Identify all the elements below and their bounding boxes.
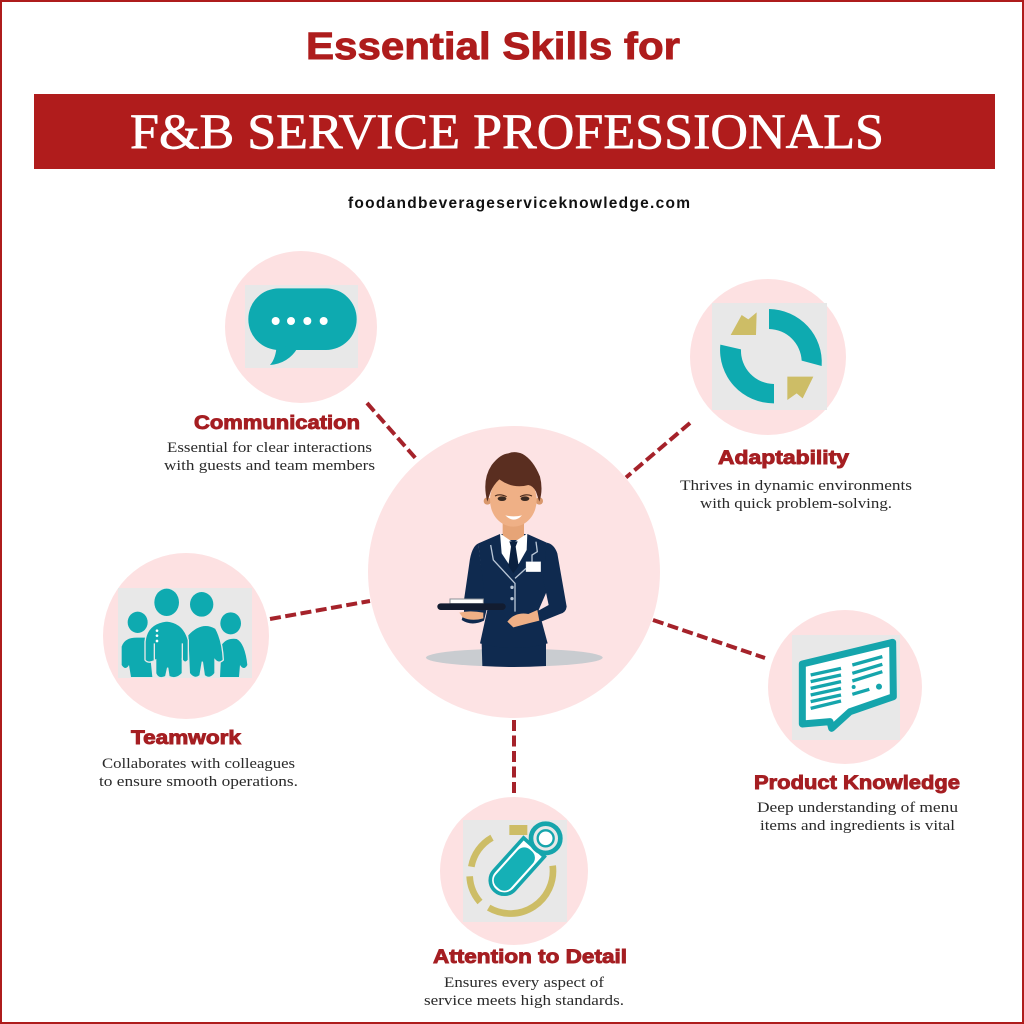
icon: magnifier and ring — [470, 824, 560, 914]
panel: teamwork — [99, 553, 298, 790]
description: adaptability — [680, 478, 912, 512]
illustration: server with tray — [426, 452, 603, 667]
description: teamwork — [99, 756, 298, 790]
description: teamwork: Collaborates with colleagues — [102, 756, 295, 772]
description: communication — [164, 440, 375, 474]
dashed connectors — [270, 403, 765, 796]
description: teamwork: to ensure smooth operations. — [99, 774, 298, 790]
panel: attention to detail — [424, 797, 627, 1009]
icon: open menu bubble — [802, 642, 893, 728]
description: product knowledge: Deep understanding of menu — [757, 800, 959, 816]
banner: F&B SERVICE PROFESSIONALS — [130, 103, 884, 159]
heading: attention to detail: Attention to Detail — [433, 946, 627, 968]
description: product knowledge: items and ingredients is vital — [760, 818, 955, 834]
panel: communication — [164, 251, 377, 474]
description: attention to detail: Ensures every aspect of — [444, 975, 604, 991]
banner — [34, 94, 995, 169]
description: product knowledge — [757, 800, 959, 834]
panel: adaptability — [680, 279, 912, 512]
description: attention to detail — [424, 975, 624, 1009]
central circle with server — [368, 426, 660, 718]
description: adaptability: Thrives in dynamic environments — [680, 478, 912, 494]
website url: foodandbeverageserviceknowledge.com — [348, 195, 690, 212]
heading: communication: Communication — [194, 412, 360, 434]
heading: adaptability: Adaptability — [718, 447, 849, 469]
description: communication: Essential for clear interactions — [167, 440, 372, 456]
heading: product knowledge: Product Knowledge — [754, 772, 960, 794]
description: attention to detail: service meets high standards. — [424, 993, 624, 1009]
icon: team of people — [122, 589, 247, 678]
title: Essential Skills for — [306, 26, 680, 68]
heading: teamwork: Teamwork — [131, 727, 241, 749]
panel: product knowledge — [754, 610, 960, 834]
description: adaptability: with quick problem-solving. — [700, 496, 892, 512]
icon: speech bubble — [248, 288, 357, 365]
icon: cycle arrows — [720, 309, 822, 403]
description: communication: with guests and team members — [164, 458, 375, 474]
